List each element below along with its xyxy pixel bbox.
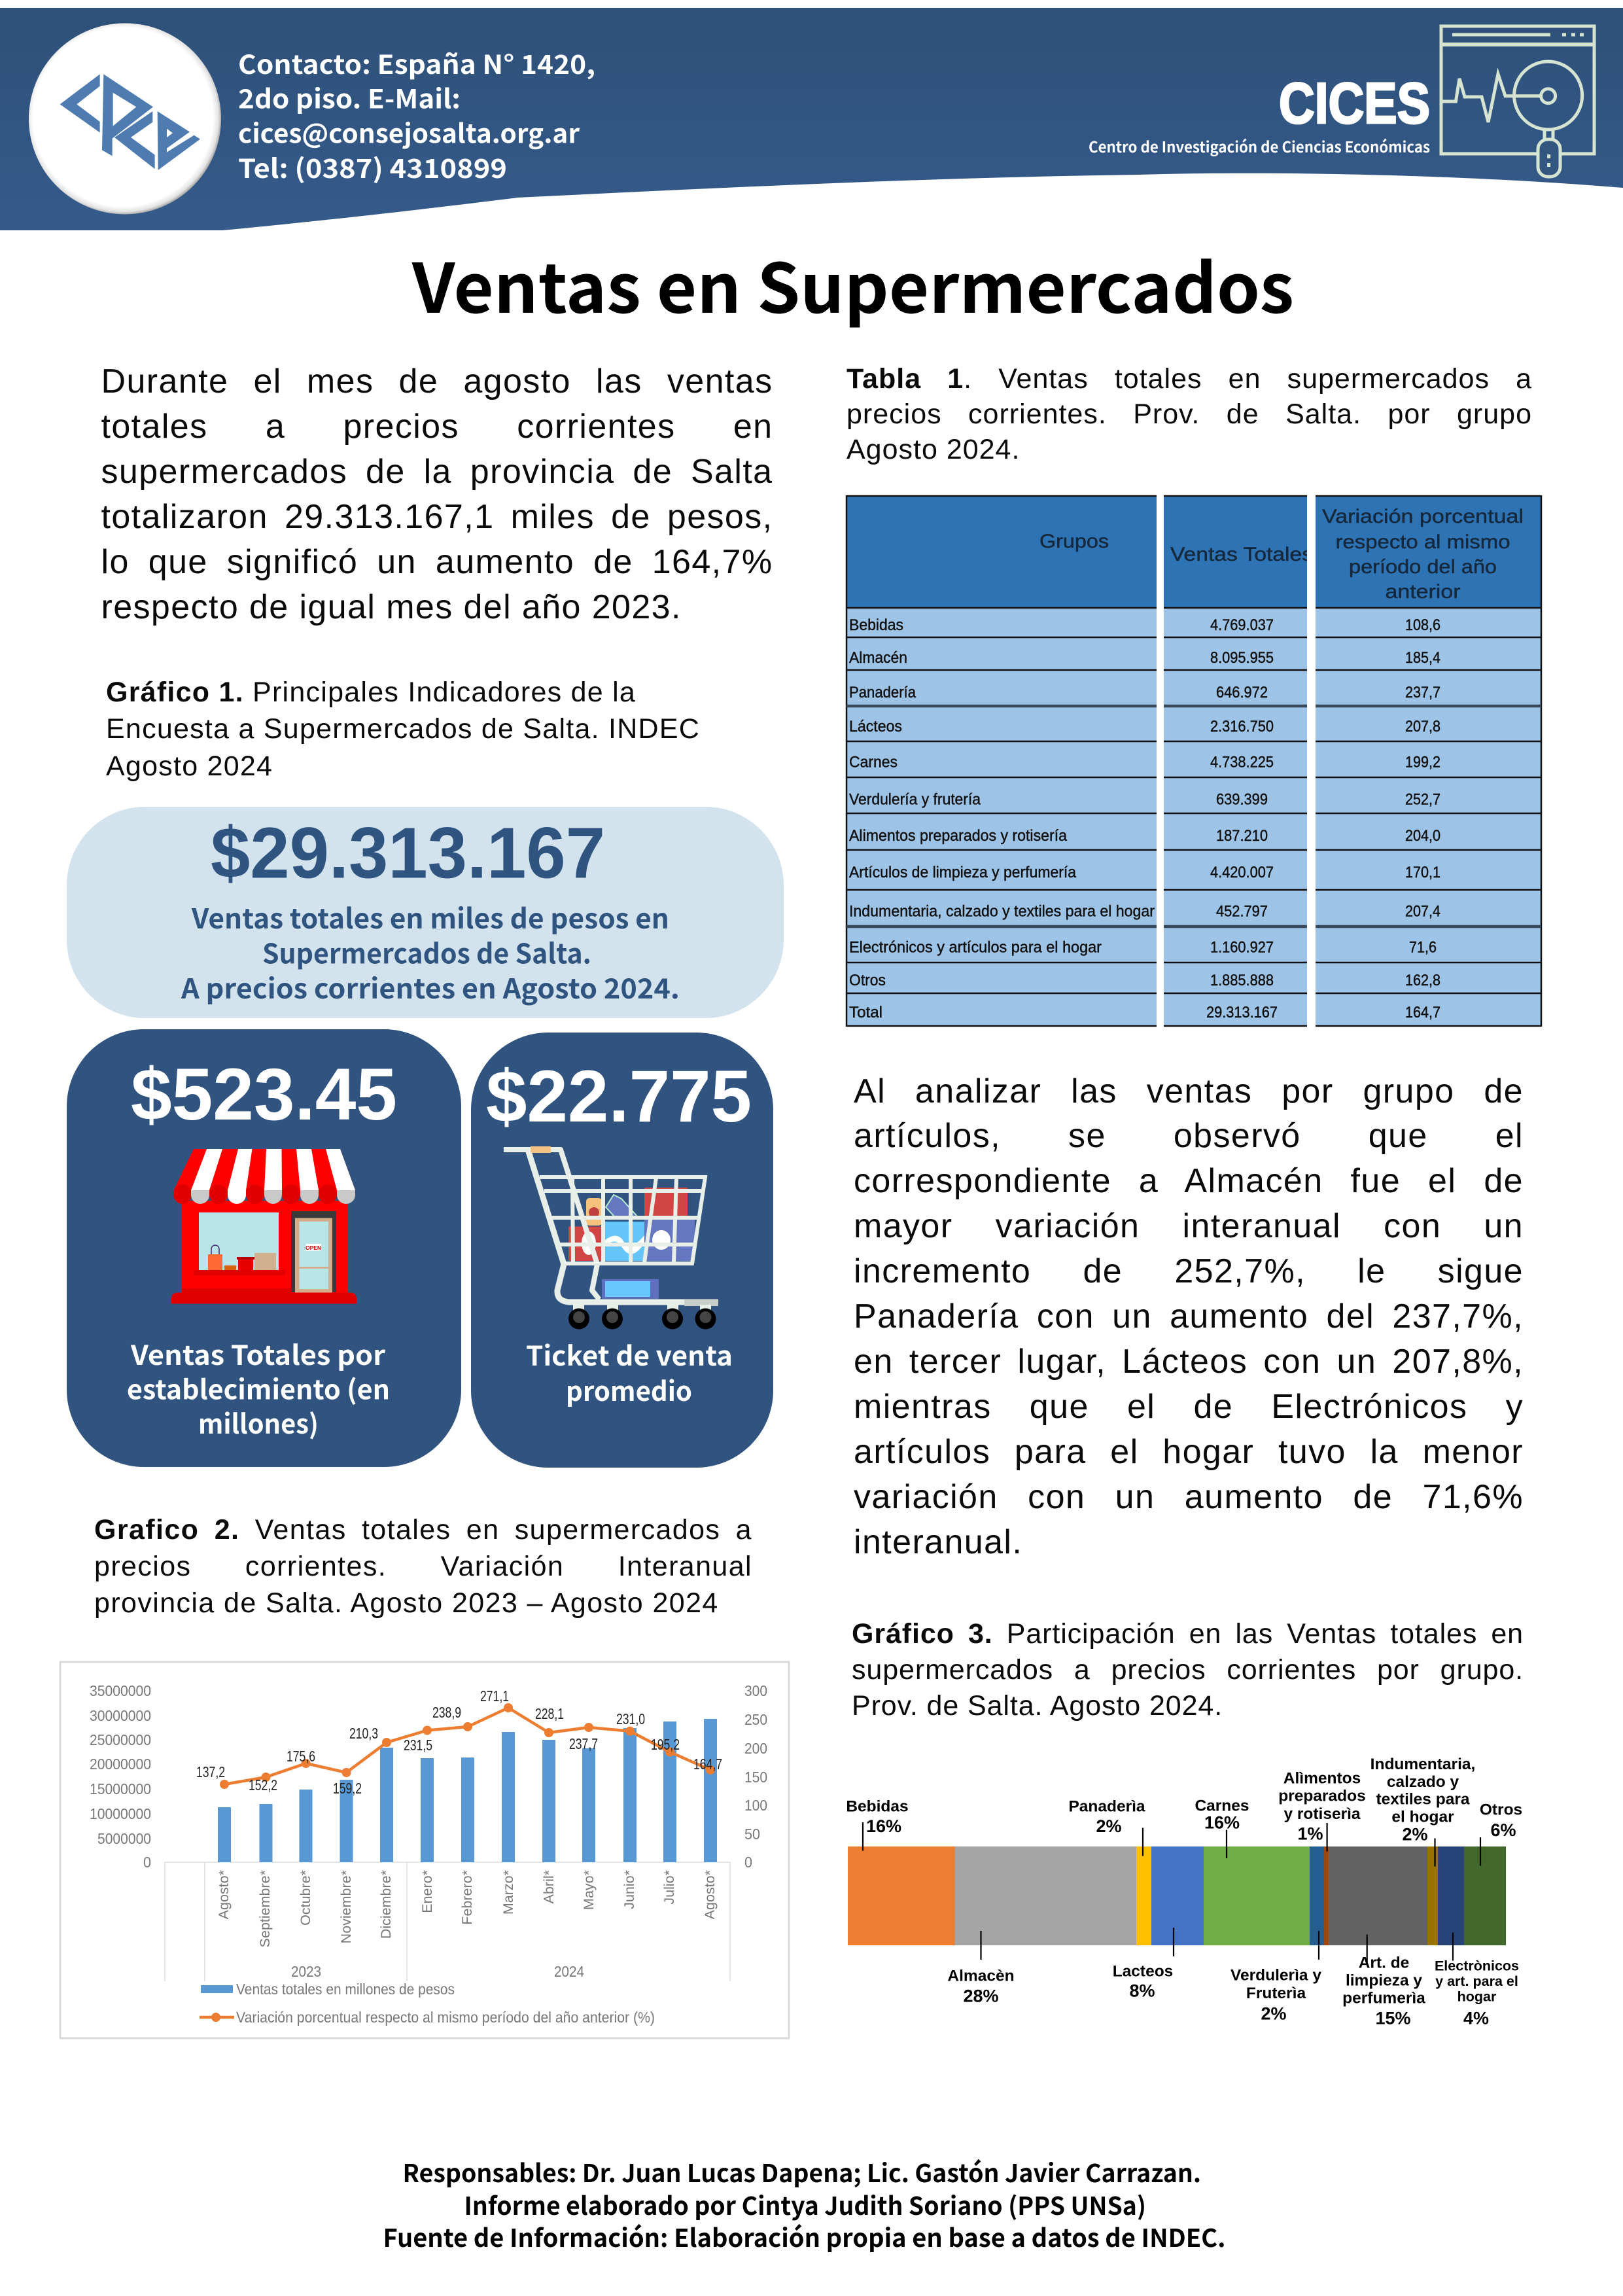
segment labels above: textiles para — [1376, 1790, 1470, 1809]
text block: intro paragraph: lo que significó un aumento de 164,7% — [101, 543, 773, 581]
right axis labels: 250 — [744, 1711, 767, 1728]
text block: analysis paragraph: Panadería con un aumento del 237,7%, — [854, 1298, 1524, 1335]
month labels: Diciembre* — [378, 1869, 394, 1939]
segment labels above — [846, 1756, 1522, 1844]
table rows: 199,2 — [1405, 754, 1440, 771]
table rows: Almacén — [849, 649, 907, 667]
table header: respecto al mismo — [1336, 531, 1510, 553]
text block: intro paragraph: totales a precios corrientes en — [101, 408, 773, 446]
segment labels above: calzado y — [1387, 1773, 1459, 1791]
text block: analysis paragraph: mayor variación interanual con un — [854, 1207, 1524, 1245]
segment labels above: Alìmentos — [1283, 1769, 1361, 1788]
caption: chart 1: Encuesta a Supermercados de Salta. INDEC — [106, 713, 700, 745]
average ticket label — [526, 1334, 733, 1409]
total sales number: $29.313.167 — [211, 813, 605, 894]
table header: período del año — [1349, 556, 1497, 578]
table rows: 4.738.225 — [1210, 754, 1274, 771]
data labels: 159,2 — [333, 1780, 362, 1797]
left axis labels: 10000000 — [90, 1805, 151, 1822]
text block: analysis paragraph: artículos para el hogar tuvo la menor — [854, 1433, 1524, 1471]
data labels: 195,2 — [651, 1736, 680, 1753]
per establishment label: establecimiento (en — [127, 1368, 390, 1407]
segment labels above: Otros — [1480, 1801, 1522, 1819]
table rows: 452.797 — [1216, 903, 1268, 920]
segment labels below: Electrònicos — [1435, 1958, 1519, 1973]
bars — [218, 1719, 717, 1862]
year labels: 2023 — [291, 1963, 321, 1980]
caption: chart 2: Grafico 2. Ventas totales en supermercados a — [94, 1514, 752, 1545]
month labels: Julio* — [661, 1869, 677, 1905]
segment labels above: 2% — [1402, 1824, 1428, 1844]
contact text: cices@consejosalta.org.ar — [238, 113, 580, 150]
segment labels above: Indumentaria, — [1370, 1756, 1475, 1773]
segment labels below: Fruterìa — [1246, 1985, 1306, 2002]
right axis labels: 50 — [744, 1826, 760, 1843]
table rows: 1.885.888 — [1210, 972, 1274, 989]
table rows: 204,0 — [1405, 827, 1440, 845]
caption: chart 2: provincia de Salta. Agosto 2023 – Agosto 2024 — [94, 1587, 719, 1619]
table rows: 185,4 — [1405, 649, 1440, 667]
right axis labels: 200 — [744, 1740, 767, 1757]
month labels: Marzo* — [500, 1869, 516, 1915]
per establishment label: millones) — [198, 1402, 319, 1441]
average ticket number: $22.775 — [486, 1055, 752, 1137]
data labels: 231,5 — [404, 1737, 432, 1754]
text block: analysis paragraph: variación con un aumento de 71,6% — [854, 1478, 1524, 1516]
segment labels below — [947, 1954, 1519, 2028]
table rows: 1.160.927 — [1210, 938, 1274, 957]
table rows: 187.210 — [1216, 827, 1268, 845]
total sales description: Ventas totales en miles de pesos en — [191, 897, 669, 937]
segment labels below: perfumerìa — [1342, 1989, 1425, 2007]
segment labels below: 15% — [1375, 2009, 1411, 2028]
year labels — [291, 1963, 584, 1980]
year labels: 2024 — [554, 1963, 584, 1980]
icon: CPCE logo badge — [29, 24, 221, 215]
table rows: Otros — [849, 972, 886, 989]
text block: analysis paragraph: interanual. — [854, 1523, 1022, 1561]
table rows: 252,7 — [1405, 790, 1440, 809]
month labels: Noviembre* — [338, 1869, 354, 1943]
segment labels above: el hogar — [1391, 1809, 1454, 1826]
data labels: 137,2 — [196, 1763, 225, 1780]
icon: storefront — [171, 1149, 357, 1303]
icon: shopping cart — [504, 1146, 718, 1330]
caption: chart 3: supermercados a precios corrientes por grupo. — [852, 1654, 1524, 1686]
caption: chart 3: Prov. de Salta. Agosto 2024. — [852, 1690, 1223, 1722]
footer credits: Responsables: Dr. Juan Lucas Dapena; Lic. Gastón Javier Carrazan. — [403, 2153, 1201, 2189]
text block: analysis paragraph: en tercer lugar, Lácteos con un 207,8%, — [854, 1343, 1524, 1381]
month labels: Enero* — [419, 1869, 435, 1913]
CICES wordmark: CICES — [1279, 71, 1430, 135]
month labels: Junio* — [621, 1869, 637, 1909]
segment labels above: Panaderìa — [1068, 1798, 1145, 1815]
stacked bar — [848, 1846, 1506, 1945]
month labels: Mayo* — [581, 1869, 597, 1910]
text block: intro paragraph — [101, 362, 773, 626]
footer credits: Informe elaborado por Cintya Judith Soriano (PPS UNSa) — [464, 2186, 1146, 2222]
month labels: Abril* — [541, 1869, 557, 1903]
month labels: Febrero* — [459, 1869, 475, 1925]
caption: chart 1: Agosto 2024 — [106, 750, 273, 781]
right axis labels: 150 — [744, 1769, 767, 1786]
text block: analysis paragraph: mientras que el de Electrónicos y — [854, 1388, 1524, 1426]
table header — [1039, 506, 1524, 603]
table header: anterior — [1386, 581, 1461, 603]
data labels: 238,9 — [432, 1704, 461, 1721]
header banner — [0, 8, 1623, 230]
data labels: 164,7 — [693, 1756, 722, 1773]
table rows: Total — [849, 1004, 882, 1021]
segment labels below: 2% — [1261, 2004, 1287, 2023]
chart 2: sales and year-on-year variation — [60, 1662, 789, 2038]
per establishment label — [127, 1333, 390, 1441]
left axis labels — [90, 1682, 151, 1871]
average ticket label: Ticket de venta — [526, 1334, 733, 1373]
table rows: 207,4 — [1405, 903, 1440, 920]
chart legend: Ventas totales en millones de pesos — [236, 1981, 455, 1998]
table rows: 108,6 — [1405, 616, 1440, 634]
caption: chart 2 — [94, 1514, 752, 1619]
caption: chart 3: Gráfico 3. Participación en las Ventas totales en — [852, 1618, 1524, 1650]
segment labels above: 1% — [1297, 1824, 1323, 1844]
data labels: 228,1 — [535, 1705, 564, 1722]
per establishment number: $523.45 — [131, 1053, 397, 1135]
leader lines — [863, 1822, 1480, 1963]
segment labels above: Bebidas — [846, 1798, 909, 1815]
left axis labels: 15000000 — [90, 1780, 151, 1797]
panel: average ticket — [471, 1033, 773, 1468]
chart 3: participation by group — [846, 1756, 1522, 2028]
table rows: Bebidas — [849, 616, 903, 634]
table header: Grupos — [1039, 531, 1109, 552]
text block: analysis paragraph: incremento de 252,7%, le sigue — [854, 1252, 1524, 1290]
left axis labels: 25000000 — [90, 1731, 151, 1748]
table rows: 71,6 — [1409, 938, 1437, 957]
left axis labels: 5000000 — [97, 1830, 151, 1847]
segment labels below: y art. para el — [1435, 1973, 1518, 1989]
average ticket label: promedio — [566, 1369, 692, 1409]
data labels: 210,3 — [349, 1725, 378, 1742]
data labels — [196, 1687, 722, 1797]
table rows — [849, 616, 1440, 1021]
data labels: 231,0 — [616, 1710, 645, 1727]
month labels — [216, 1869, 718, 1947]
segment labels below: Verdulerìa y — [1230, 1967, 1321, 1984]
icon: browser window with pulse and magnifier — [1441, 26, 1594, 177]
month labels: Agosto* — [702, 1869, 718, 1919]
table rows: 207,8 — [1405, 718, 1440, 735]
table rows: Artículos de limpieza y perfumería — [849, 864, 1077, 881]
text block: intro paragraph: respecto de igual mes del año 2023. — [101, 588, 682, 626]
segment labels below: Almacèn — [947, 1967, 1015, 1985]
header background with curved edge — [0, 8, 1623, 230]
segment labels below: 4% — [1463, 2009, 1489, 2028]
table rows: 162,8 — [1405, 972, 1440, 989]
right axis labels — [744, 1682, 767, 1871]
contact text: Contacto: España N° 1420, — [238, 44, 595, 82]
segment labels above: 6% — [1490, 1820, 1516, 1840]
table rows: Electrónicos y artículos para el hogar — [849, 938, 1102, 957]
caption: table 1: Agosto 2024. — [846, 433, 1020, 465]
caption: table 1 — [846, 362, 1532, 465]
total sales description: A precios corrientes en Agosto 2024. — [181, 967, 680, 1007]
table rows: Alimentos preparados y rotisería — [849, 827, 1068, 845]
segment labels above: preparados — [1278, 1788, 1366, 1805]
caption: chart 1 — [106, 677, 700, 781]
caption: chart 3 — [852, 1618, 1524, 1722]
CICES wordmark: Centro de Investigación de Ciencias Económicas — [1089, 135, 1430, 157]
footer credits: Fuente de Información: Elaboración propia en base a datos de INDEC. — [383, 2218, 1226, 2254]
segment labels above: y rotiserìa — [1283, 1805, 1361, 1823]
footer credits — [383, 2153, 1226, 2254]
segment labels above: 16% — [866, 1816, 901, 1836]
data labels: 175,6 — [287, 1748, 315, 1765]
right axis labels: 300 — [744, 1682, 767, 1699]
table rows: 639.399 — [1216, 790, 1268, 809]
total sales description: Supermercados de Salta. — [262, 932, 591, 972]
line: year-on-year variation — [220, 1703, 715, 1789]
contact text: Tel: (0387) 4310899 — [238, 148, 507, 186]
table rows: 29.313.167 — [1206, 1004, 1278, 1021]
table 1: sales by group — [846, 495, 1541, 1027]
table rows: 2.316.750 — [1210, 718, 1274, 735]
chart legend: Variación porcentual respecto al mismo período del año anterior (%) — [236, 2009, 655, 2026]
table header: Ventas Totales — [1170, 544, 1313, 565]
segment labels below: 8% — [1129, 1981, 1155, 2001]
segment labels below: limpieza y — [1346, 1972, 1422, 1989]
caption: table 1: Tabla 1. Ventas totales en supermercados a — [846, 362, 1532, 394]
segment labels below: Art. de — [1359, 1954, 1409, 1972]
segment labels above: 16% — [1204, 1812, 1240, 1832]
month labels: Septiembre* — [257, 1869, 273, 1947]
table rows: Carnes — [849, 754, 898, 771]
CICES wordmark — [1089, 71, 1430, 157]
segment labels above: Carnes — [1195, 1797, 1249, 1815]
total sales description — [181, 897, 680, 1007]
month labels: Agosto* — [216, 1869, 232, 1919]
segment labels above: 2% — [1096, 1816, 1122, 1836]
text block: analysis paragraph: Al analizar las ventas por grupo de — [854, 1072, 1524, 1110]
table rows: Verdulería y frutería — [849, 790, 981, 809]
caption: chart 2: precios corrientes. Variación Interanual — [94, 1551, 752, 1582]
panel: total sales — [67, 807, 784, 1018]
table rows: 646.972 — [1216, 684, 1268, 701]
contact text — [238, 44, 595, 186]
right axis labels: 0 — [744, 1854, 752, 1871]
table rows: 4.769.037 — [1210, 616, 1274, 634]
table header: Variación porcentual — [1322, 506, 1524, 527]
table rows: Panadería — [849, 684, 916, 701]
left axis labels: 0 — [143, 1854, 151, 1871]
table rows: Indumentaria, calzado y textiles para el hogar — [849, 903, 1155, 920]
panel: sales per establishment — [67, 1029, 461, 1467]
text block: intro paragraph: supermercados de la provincia de Salta — [101, 453, 773, 491]
table rows: Lácteos — [849, 718, 902, 735]
left axis labels: 30000000 — [90, 1707, 151, 1724]
segment labels below: 28% — [963, 1987, 999, 2006]
chart legend — [200, 1981, 655, 2026]
data labels: 271,1 — [480, 1687, 509, 1704]
caption: table 1: precios corrientes. Prov. de Salta. por grupo — [846, 398, 1532, 429]
table rows: 237,7 — [1405, 684, 1440, 701]
month labels: Octubre* — [298, 1869, 313, 1926]
text block: intro paragraph: totalizaron 29.313.167,1 miles de pesos, — [101, 498, 773, 536]
segment labels below: hogar — [1457, 1989, 1497, 2005]
caption: chart 1: Gráfico 1. Principales Indicadores de la — [106, 677, 636, 708]
table rows: 4.420.007 — [1210, 864, 1274, 881]
text block: intro paragraph: Durante el mes de agosto las ventas — [101, 362, 773, 400]
table rows: 8.095.955 — [1210, 649, 1274, 667]
text block: analysis paragraph: correspondiente a Almacén fue el de — [854, 1162, 1524, 1200]
text block: analysis paragraph — [854, 1072, 1524, 1561]
contact text: 2do piso. E-Mail: — [238, 79, 461, 116]
per establishment label: Ventas Totales por — [130, 1333, 385, 1373]
table rows: 170,1 — [1405, 864, 1440, 881]
right axis labels: 100 — [744, 1797, 767, 1814]
table rows: 164,7 — [1405, 1004, 1440, 1021]
data labels: 152,2 — [249, 1776, 277, 1793]
title: Ventas en Supermercados — [411, 234, 1294, 332]
text block: analysis paragraph: artículos, se observó que el — [854, 1117, 1524, 1155]
left axis labels: 20000000 — [90, 1756, 151, 1773]
segment labels below: Lacteos — [1113, 1963, 1173, 1980]
left axis labels: 35000000 — [90, 1682, 151, 1699]
data labels: 237,7 — [569, 1735, 598, 1752]
icon: storefront: OPEN — [305, 1245, 321, 1251]
